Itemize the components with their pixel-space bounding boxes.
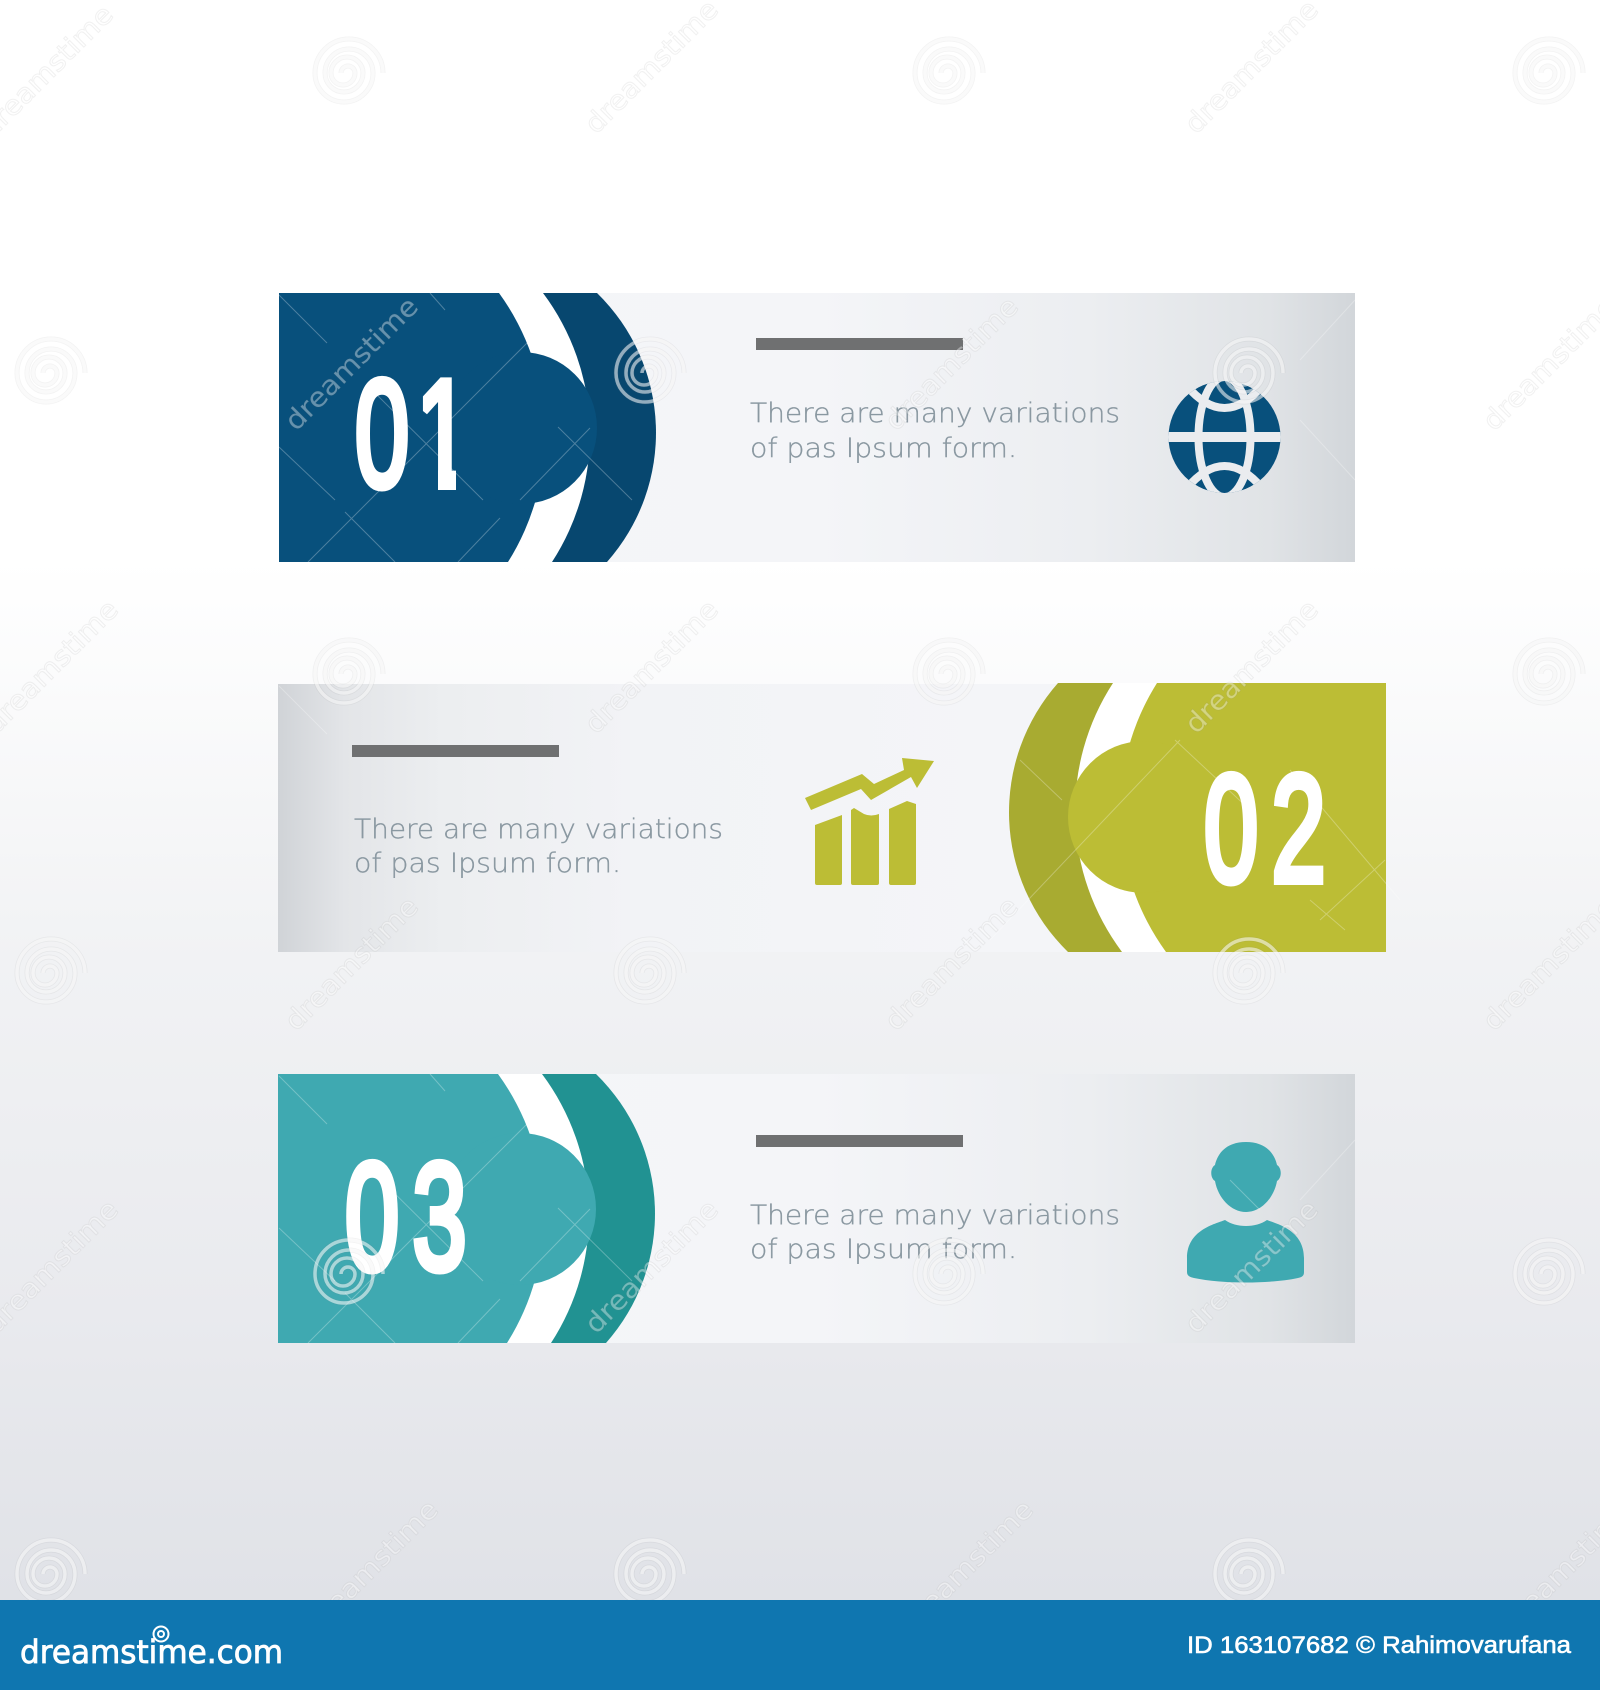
icon: growth bar chart with arrow [805,758,934,885]
watermark lines [279,293,1400,1343]
watermark text: dreamstime [894,1494,1040,1640]
watermark text: dreamstime [579,1194,725,1340]
watermark text: dreamstime [879,891,1025,1037]
panel 3 text: There are many variations [750,1200,1120,1231]
panel 3 heading bar [756,1135,963,1147]
panel 2 text: of pas Ipsum form. [354,848,621,879]
panel 2: step 02 [278,683,1386,952]
panel 2 background [278,684,1386,952]
footer credit: ID 163107682 © Rahimovarufana [1187,1632,1572,1659]
footer logo text: dreamstime.com [20,1633,283,1671]
watermark text: dreamstime [1179,0,1325,140]
watermark text: dreamstime [579,594,725,740]
watermark text: dreamstime [879,291,1025,437]
panel 3: step 03 [278,1074,1355,1343]
watermark text: dreamstime [1179,1194,1325,1340]
panel 3 background [278,1074,1355,1343]
panel 1: step 01 [279,293,1355,562]
panel 2 badge shape [1009,683,1386,952]
panel 1 badge shape [279,293,656,562]
icon: logo spiral [154,1626,168,1642]
number 02: 02 [1204,744,1339,914]
panel 2 heading bar [352,745,559,757]
watermark text: dreamstime [279,291,425,437]
panel 1 heading bar [756,338,963,350]
panel 2 text: There are many variations [354,814,723,845]
number 03: 03 [345,1132,480,1302]
footer bar [0,1600,1600,1690]
watermark text: dreamstime [1179,594,1325,740]
panel 1 text: of pas Ipsum form. [750,433,1017,464]
watermark text: dreamstime [279,891,425,1037]
icon: globe [1168,381,1280,493]
panel 3 text: of pas Ipsum form. [750,1234,1017,1265]
panel 1 text: There are many variations [750,398,1120,429]
icon: person [1187,1142,1304,1282]
watermark text: dreamstime [299,1494,445,1640]
watermark text: dreamstime [579,0,725,140]
panel 3 badge shape [278,1074,655,1343]
panel 1 background [279,293,1355,562]
number 01: 01 [355,349,477,519]
